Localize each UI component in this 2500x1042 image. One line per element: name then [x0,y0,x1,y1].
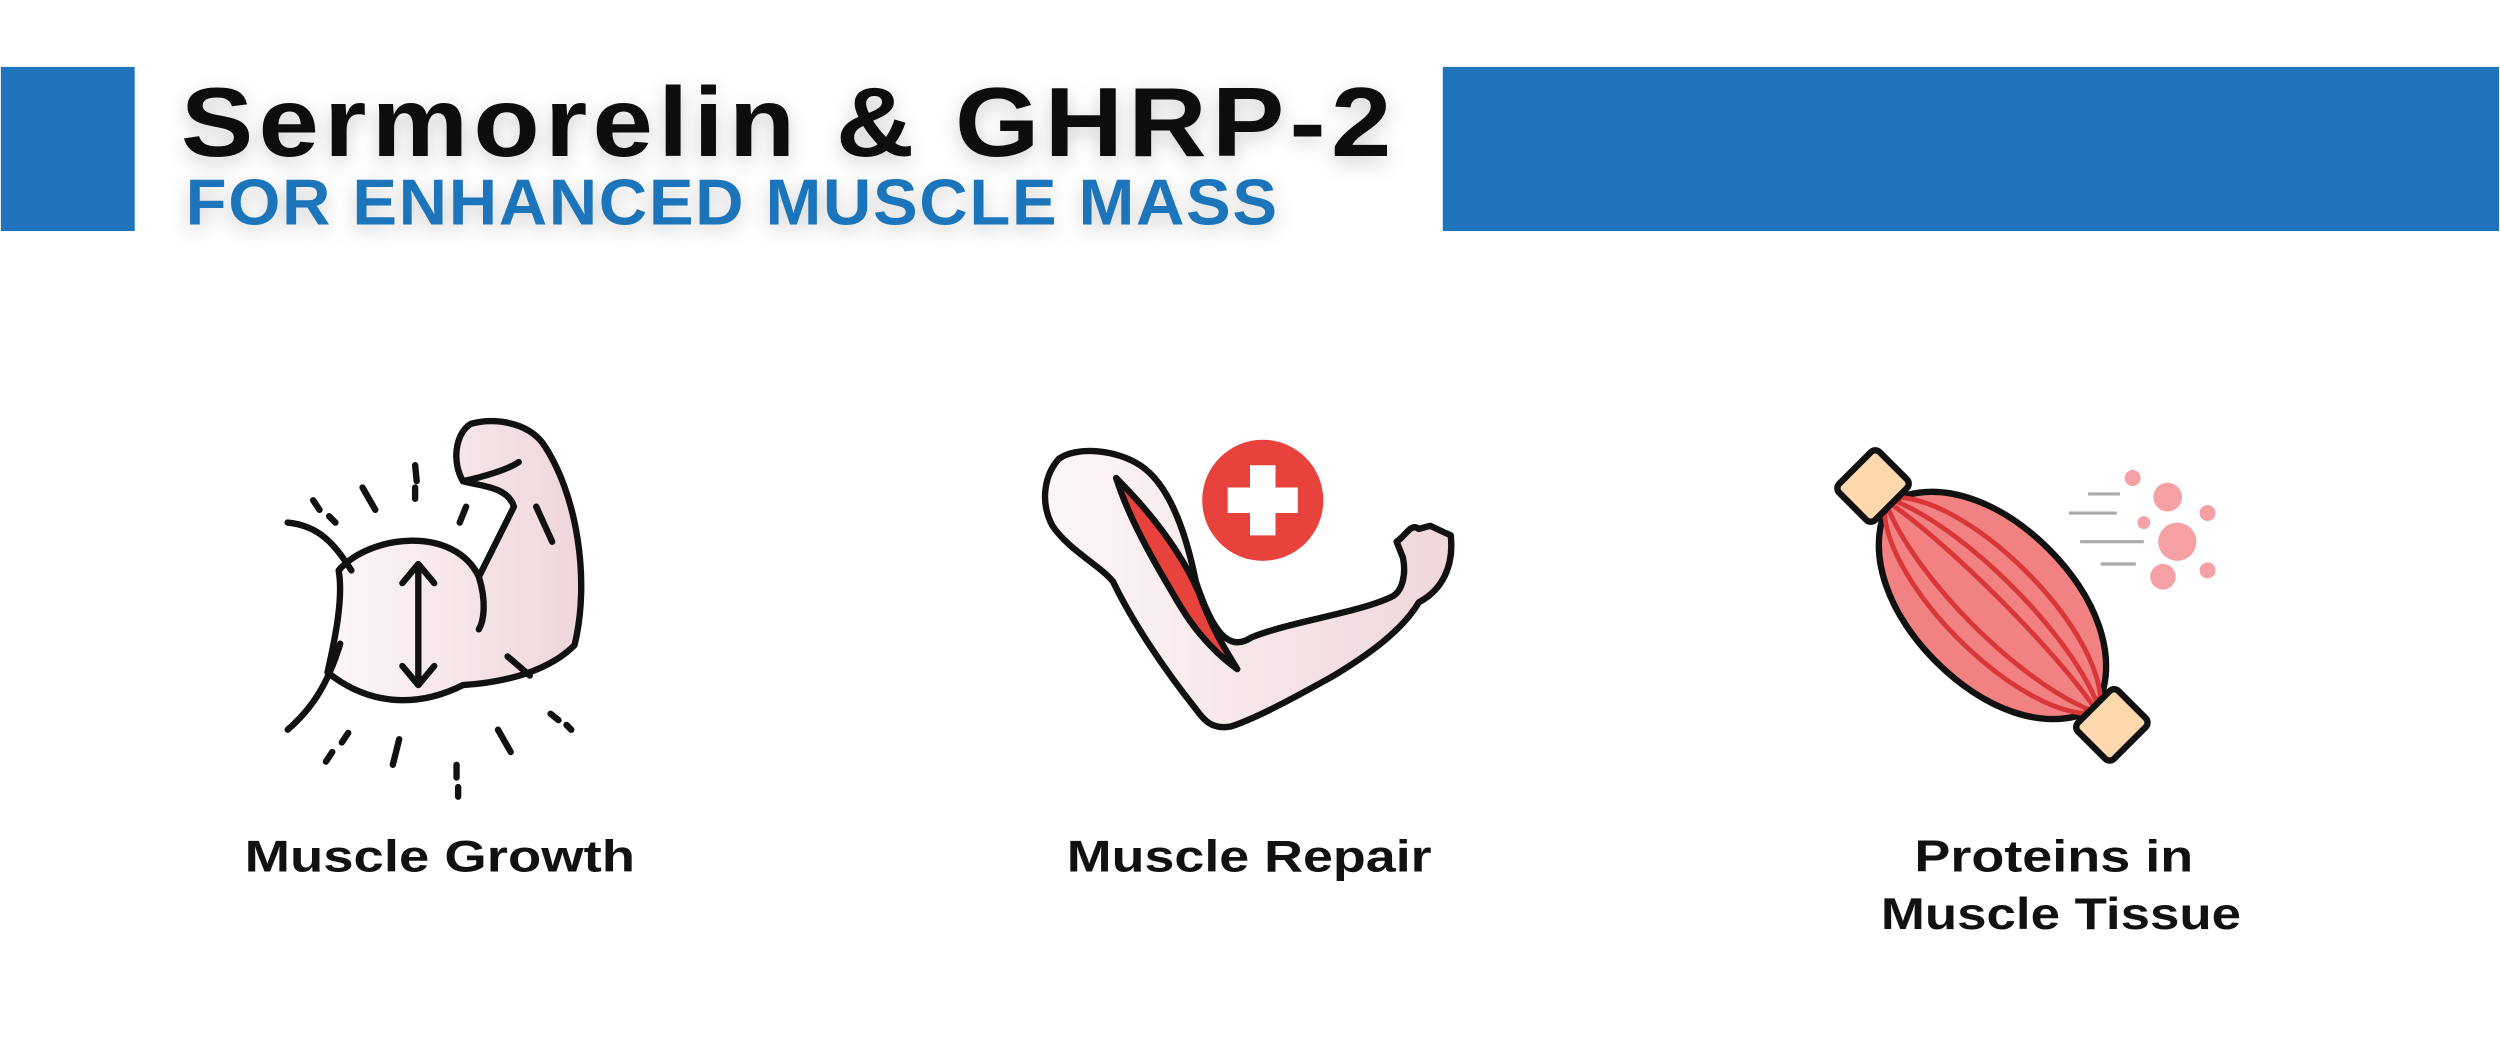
subtitle: FOR ENHANCED MUSCLE MASS [186,166,1279,239]
title: Sermorelin & GHRP-2 [181,67,1397,177]
header band left [1,67,135,231]
header band right [1443,67,2499,231]
icon: protein dots [2069,470,2216,590]
label: proteins in muscle tissue: Muscle Tissue [1881,890,2241,939]
icon: muscle tissue [1799,412,2186,799]
title [181,67,1397,239]
label: proteins in muscle tissue [1881,833,2241,939]
label: muscle growth: Muscle Growth [245,833,635,882]
label: proteins in muscle tissue: Proteins in [1914,833,2193,882]
icon: muscle repair [1045,451,1451,727]
icon: red cross badge [1202,440,1323,561]
label: muscle repair: Muscle Repair [1067,833,1432,882]
icon: muscle growth [288,421,581,797]
